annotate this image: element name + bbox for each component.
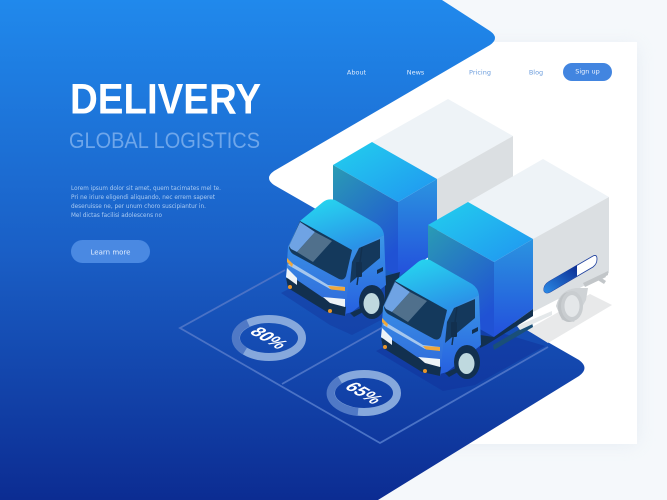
navigation: Blog [529,68,543,76]
cargo side [533,197,609,312]
rear axle struts [583,271,608,287]
rear truck cargo side [437,136,513,240]
learn more button [71,240,150,263]
shadow on white panel [527,294,612,343]
body text: Mel dictas facilisi adolescens no [71,212,162,219]
sign up button [563,63,612,81]
cab [381,259,481,379]
donut chart: 65% [331,374,397,412]
donut chart: 65%: 65% [340,379,389,407]
donut chart: 80% [236,319,302,357]
body text [71,185,221,219]
rear truck blue box [333,142,437,276]
body text: Pri ne iriure eligendi aliquando, nec errem saperet [71,194,216,201]
shadow on ground, rear truck [281,262,420,335]
learn more button: Learn more [91,248,130,256]
donut chart: 80%: 80% [245,324,294,352]
rear truck chassis [385,272,400,305]
navigation: Pricing [469,68,491,76]
rear truck [286,99,513,319]
navigation [347,68,543,76]
white page panel [250,42,637,444]
rear truck cab [286,199,386,319]
shadow on ground, front truck [376,316,545,391]
subheading: GLOBAL LOGISTICS [69,128,260,153]
blue box [428,202,533,337]
chassis [480,309,552,350]
heading: DELIVERY [70,76,261,124]
sign up button: Sign up [575,68,600,76]
rear truck cargo top [372,99,513,179]
body text: Lorem ipsum dolor sit amet, quem tacimates mel te. [71,185,221,192]
navigation: News [407,68,425,76]
rear wheel [556,288,588,322]
cargo top [468,159,609,239]
progress bar [544,255,597,293]
front truck [381,159,609,379]
navigation: About [347,68,367,76]
parking grid lines [180,270,548,443]
body text: deseruisse ne, per unum choro suscipiantur in. [71,203,206,210]
